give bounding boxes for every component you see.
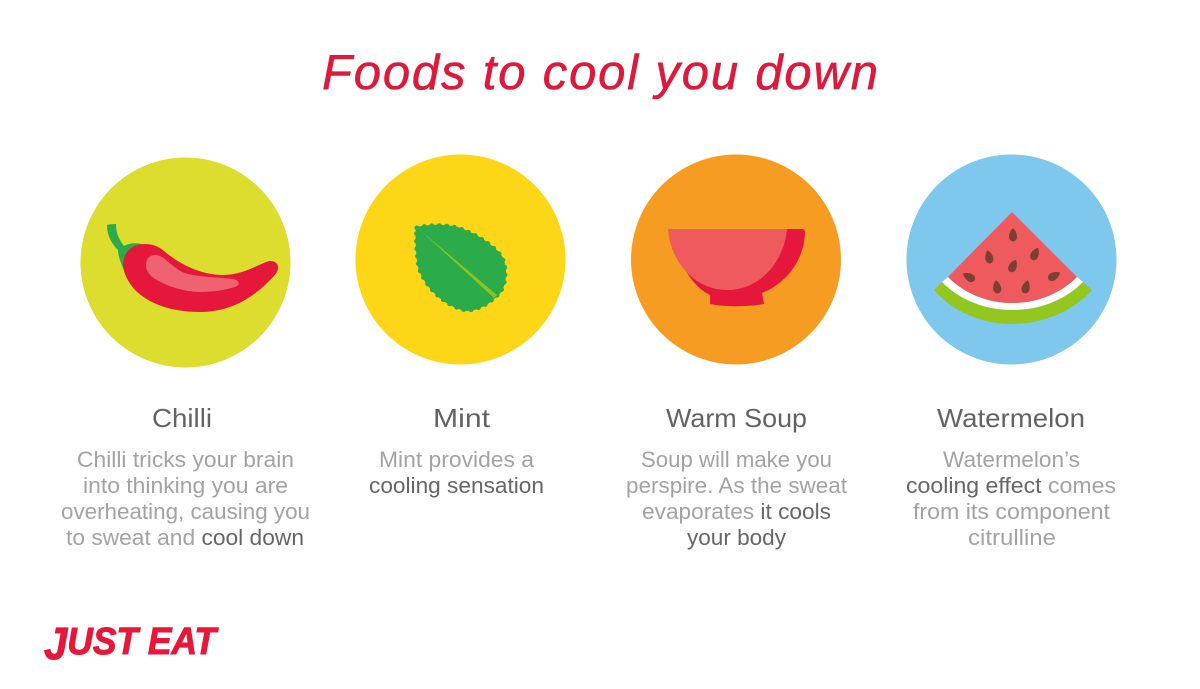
heading: Warm Soup: Warm Soup <box>666 403 807 433</box>
icon: watermelon slice <box>934 212 1092 324</box>
icon: soup circle <box>631 154 841 364</box>
heading: Chilli: Chilli <box>152 403 212 433</box>
logo: Just Eat: J <box>44 618 68 669</box>
text: soup description: evaporates it cools <box>642 499 831 524</box>
title: Foods to cool you down <box>322 46 878 100</box>
icon: chilli circle <box>80 158 290 368</box>
icon: mint leaf <box>417 226 505 310</box>
icon: watermelon circle <box>906 154 1116 364</box>
text: chilli description: to sweat and cool down <box>66 525 304 550</box>
icon: chilli pepper <box>107 224 278 312</box>
text: soup description: your body <box>687 525 786 550</box>
heading: Watermelon: Watermelon <box>937 403 1085 433</box>
icon: mint circle <box>356 154 566 364</box>
text: watermelon description: cooling effect comes <box>906 473 1116 498</box>
text: soup description <box>626 447 847 550</box>
panel: watermelon <box>906 154 1116 550</box>
panel: mint <box>356 154 566 498</box>
text: chilli description: Chilli tricks your brain <box>77 447 294 472</box>
text: mint description: cooling sensation <box>369 473 544 498</box>
panel: warm soup <box>626 154 847 550</box>
text: chilli description <box>61 447 310 550</box>
text: mint description <box>369 447 544 498</box>
text: watermelon description <box>906 447 1116 550</box>
logo: Just Eat: UST EAT <box>67 621 219 663</box>
panel: chilli <box>61 158 310 550</box>
text: chilli description: into thinking you are <box>83 473 288 498</box>
text: watermelon description: Watermelon’s <box>943 447 1080 472</box>
text: mint description: Mint provides a <box>379 447 535 472</box>
text: watermelon description: from its component <box>913 499 1110 524</box>
text: watermelon description: citrulline <box>968 525 1056 550</box>
text: soup description: Soup will make you <box>641 447 832 472</box>
icon: soup bowl <box>668 229 805 306</box>
text: chilli description: overheating, causing you <box>61 499 310 524</box>
text: soup description: perspire. As the sweat <box>626 473 847 498</box>
heading: Mint: Mint <box>433 403 491 433</box>
